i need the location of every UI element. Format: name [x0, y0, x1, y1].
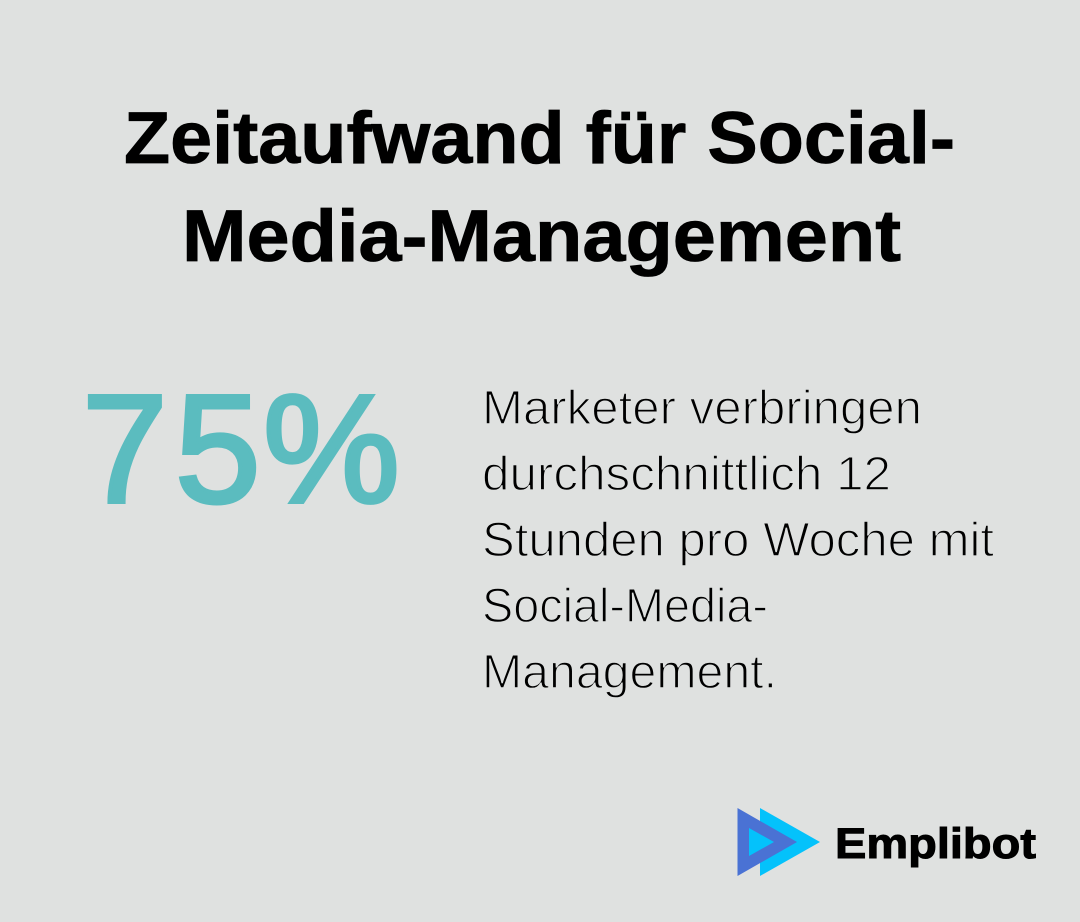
- logo: Emplibot: [738, 808, 1036, 876]
- description text: [482, 382, 994, 699]
- logo wordmark: Emplibot: [835, 820, 1036, 868]
- description text: Management.: [482, 646, 777, 699]
- big stat: 75%: 75%: [82, 363, 400, 535]
- title: Zeitaufwand für Social-: [124, 98, 955, 179]
- title: Media-Management: [182, 196, 901, 277]
- description text: Social-Media-: [482, 580, 768, 633]
- title: [124, 98, 955, 277]
- icon: play triangles: [738, 808, 820, 876]
- description text: Marketer verbringen: [482, 382, 922, 435]
- description text: durchschnittlich 12: [482, 448, 891, 501]
- description text: Stunden pro Woche mit: [482, 514, 994, 567]
